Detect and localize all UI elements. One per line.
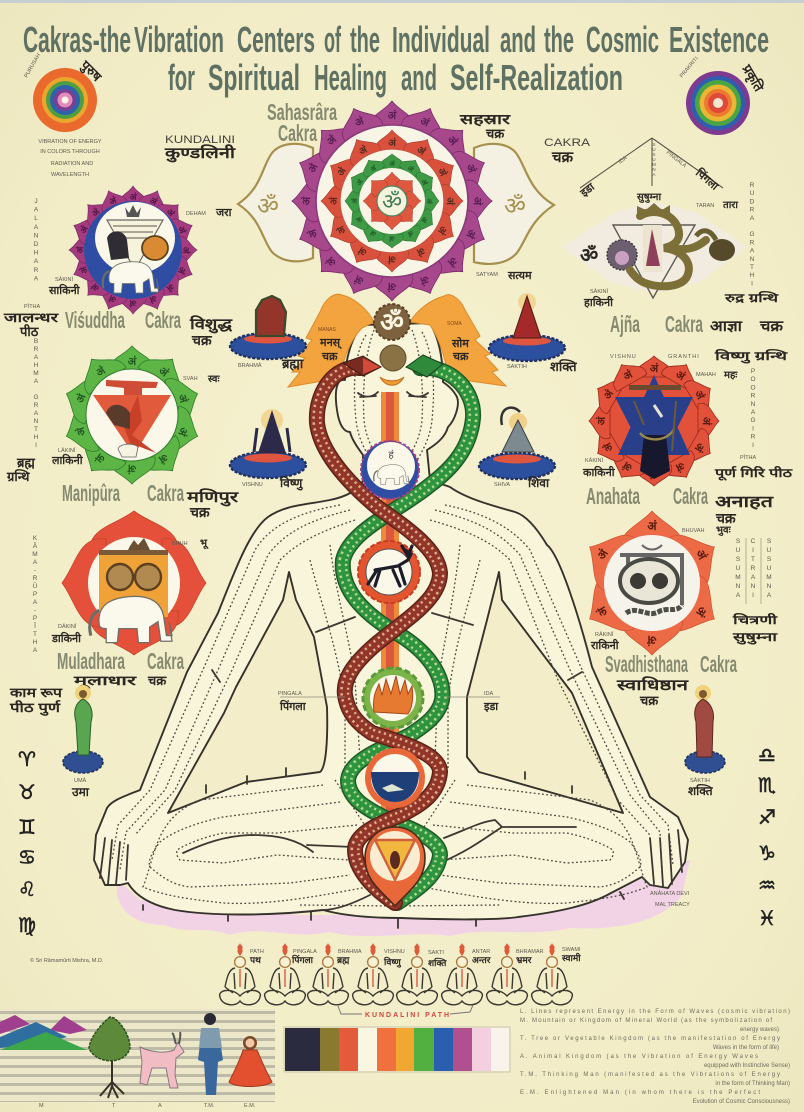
- title: Individual: [392, 19, 490, 60]
- legend text: in the form of Thinking Man): [715, 1081, 790, 1087]
- sahasrara side lobes: [238, 144, 554, 264]
- colour spectrum bars: [284, 1027, 510, 1072]
- svadhisthana labels: चक्र: [639, 693, 659, 708]
- title: Self-Realization: [450, 57, 623, 98]
- jalandhara pitha label: जालन्धर: [3, 310, 59, 325]
- panel letters: M: [39, 1103, 44, 1109]
- right wing: [410, 295, 506, 386]
- purusah colour circle: पुरुष: [76, 57, 105, 85]
- small figure labels: BRAHMA: [338, 949, 362, 955]
- pink aura beneath figure: [117, 768, 690, 936]
- wings and om medallion: ॐ: [380, 307, 404, 337]
- left wing: [288, 294, 374, 387]
- spine: [381, 392, 399, 862]
- sahasrara small labels: जरा: [215, 207, 233, 219]
- goat: [140, 1032, 184, 1088]
- visuddha heading: चक्र: [191, 332, 213, 348]
- left arm gap: [168, 572, 327, 813]
- centre om: ॐ: [382, 189, 402, 214]
- creases: [143, 613, 624, 928]
- eight small figures: [220, 943, 572, 1005]
- kundalini label: KUNDALINI: [165, 134, 235, 146]
- sahasrara label: Sahasrâra: [267, 99, 337, 125]
- ajna labels: [583, 182, 780, 309]
- panel letters: [39, 1103, 256, 1109]
- sahasrara side lobes: ॐ: [257, 193, 279, 220]
- vishnu granthi label: पूर्ण गिरि पीठ: [714, 466, 793, 481]
- sahasrara label: Cakra: [278, 120, 317, 146]
- kama rupa pitha labels: काम रूप: [9, 685, 63, 700]
- manipura heading: [62, 480, 239, 520]
- small figure labels: पथ: [249, 955, 262, 965]
- susumna nadi labels: SUSUMNA: [734, 538, 742, 601]
- muladhara cakra: [62, 511, 206, 655]
- pingala ida labels: [278, 691, 500, 713]
- wings and om medallion: मनस्: [319, 337, 342, 350]
- vishnu deity: VISHNU: [242, 482, 263, 488]
- small figure labels: विष्णु: [383, 956, 402, 968]
- ajna triangle lines: तारा: [722, 200, 738, 211]
- nadi dotted lines: [112, 330, 673, 906]
- ajna triangle lines: पिंगला: [692, 165, 723, 193]
- vibration caption: RADIATION AND: [51, 161, 93, 167]
- sahasrara label: चक्र: [485, 126, 505, 141]
- muladhara heading: Muladhara: [57, 648, 125, 674]
- kama rupa pitha labels: [9, 535, 209, 716]
- shakti deity: SAKTIH: [507, 364, 527, 370]
- legend text: [520, 1009, 790, 1105]
- muladhara heading: चक्र: [147, 673, 167, 688]
- kama rupa pitha labels: KÂMA-RÛPA-PÎTHA: [32, 535, 38, 655]
- shiva deity: [479, 408, 555, 490]
- ajna heading: Cakra: [665, 311, 703, 337]
- small figure labels: SAKTI: [428, 950, 444, 956]
- vishnu deity: [230, 409, 306, 491]
- zodiac signs right: ♏︎: [758, 775, 776, 797]
- susumna nadi labels: चित्रणी: [731, 613, 778, 627]
- small figure labels: शक्ति: [428, 957, 447, 968]
- serpent heads and third eye: [343, 345, 443, 385]
- seated figure: [94, 323, 688, 928]
- wings and om medallion: चक्र: [452, 351, 469, 363]
- small figure labels: BHRAMAR: [516, 949, 544, 955]
- red petal ring: [321, 130, 463, 272]
- kama rupa pitha labels: पीठ पुर्ण: [9, 700, 61, 716]
- ajna heading: Ajña: [610, 311, 640, 337]
- brahma granthi hindi: [6, 455, 35, 484]
- anahata heading: KÂKINÎ: [585, 457, 604, 464]
- artist credit: [650, 890, 690, 908]
- legend text: Waves in the form of life): [713, 1045, 779, 1051]
- red serpent: [317, 368, 440, 903]
- pingala ida labels: PINGALA: [278, 691, 302, 697]
- kama rupa pitha labels: भू: [200, 538, 209, 550]
- kundalini label: कुण्डलिनी: [164, 144, 236, 163]
- shakini figure right: शक्ति: [688, 784, 714, 798]
- artist credit: MAL TREACY: [655, 902, 690, 908]
- uma figure: [63, 685, 103, 799]
- sakini label: SÂKINÎ: [55, 276, 74, 283]
- title: the: [544, 19, 574, 60]
- ajna triangle lines: SUSUMNA: [651, 142, 656, 177]
- shakti deity: [489, 293, 577, 374]
- vishnu granthi label: महः: [723, 370, 738, 381]
- manipura heading: Cakra: [147, 480, 184, 506]
- muladhara heading: मूलाधार: [72, 673, 137, 689]
- wings and om medallion: [288, 294, 506, 387]
- vishnu granthi label: VISHNU: [610, 354, 637, 360]
- sakini label: साकिनी: [48, 283, 81, 297]
- anahata heading: [582, 457, 774, 526]
- title: Vibration: [134, 19, 224, 60]
- fingers: [100, 830, 682, 886]
- lakini label: SVAH: [183, 376, 198, 382]
- anahata cakra: [589, 356, 719, 486]
- sahasrara label: [267, 99, 512, 146]
- wings and om medallion: चक्र: [321, 351, 338, 363]
- pingala ida labels: IDA: [484, 691, 494, 697]
- anahata heading: काकिनी: [582, 465, 616, 479]
- visuddha heading: विशुद्ध: [189, 315, 233, 334]
- panel letters: E.M.: [244, 1103, 256, 1109]
- zodiac signs left: ♋︎: [18, 847, 36, 869]
- brahma deity: ब्रह्मा: [281, 356, 304, 371]
- vibration caption: VIBRATION OF ENERGY: [38, 139, 102, 145]
- visuddha heading: Viśuddha: [65, 307, 125, 333]
- kama rupa pitha labels: BHUH: [172, 541, 188, 547]
- svadhisthana cakra: [574, 511, 730, 655]
- title: and: [401, 57, 437, 98]
- orange figure: [142, 236, 168, 260]
- shiva deity: SHIVA: [494, 482, 510, 488]
- eyes: [358, 392, 428, 397]
- susumna nadi labels: CITRANI: [750, 538, 756, 601]
- zodiac signs right: ♓︎: [758, 908, 776, 930]
- svadhisthana labels: [590, 525, 737, 708]
- small figure labels: PINGALA: [293, 949, 317, 955]
- manipura cakra: [59, 346, 205, 484]
- shiva figure: [107, 231, 129, 260]
- anahata heading: चक्र: [715, 510, 737, 526]
- ajna labels: SÂKINÎ: [590, 288, 609, 295]
- title: [23, 19, 769, 98]
- jalandhara pitha label: पीठ: [19, 324, 40, 339]
- zodiac signs left: ♉︎: [18, 782, 36, 804]
- ajna triangle lines: इडा: [578, 180, 598, 200]
- copyright: © Sri Râmamûrti Mishra, M.D.: [30, 957, 104, 964]
- outer magenta petals: [292, 101, 492, 301]
- legend text: energy waves): [740, 1027, 779, 1033]
- visuddha cakra: [69, 186, 197, 314]
- muladhara heading: [57, 648, 184, 689]
- shakini figure right: SÂKTIH: [690, 777, 710, 784]
- standing man: [198, 1013, 223, 1095]
- anahata heading: Anahata: [586, 483, 640, 509]
- cakra label: चक्र: [551, 149, 575, 166]
- uma figure: उमा: [71, 785, 90, 799]
- ajna heading: [610, 311, 785, 337]
- title: Healing: [314, 57, 387, 98]
- anahata heading: अनाहत: [715, 494, 774, 511]
- prakriti colour circle: प्रकृति: [738, 61, 767, 95]
- svadhisthana labels: भुवः: [716, 525, 732, 536]
- inner red petals: [363, 172, 421, 230]
- wings and om medallion: SOMA: [447, 321, 462, 327]
- pingala ida labels: इडा: [483, 701, 499, 713]
- susumna nadi labels: [731, 538, 778, 645]
- kundalini path: [338, 1005, 473, 1019]
- kundalini path: KUNDALINI PATH: [365, 1012, 449, 1019]
- zodiac signs left: ♌︎: [18, 879, 36, 901]
- legend text: L. Lines represent Energy in the Form of Waves (cosmic vibration): [520, 1009, 790, 1015]
- uma figure: UMÂ: [74, 777, 87, 784]
- svadhisthana labels: स्वाधिष्ठान: [616, 676, 689, 694]
- solar plexus cakra: [363, 668, 423, 728]
- zodiac signs left: ♍︎: [18, 915, 36, 937]
- enlightened man: [229, 1036, 272, 1086]
- jalandhara vertical label: JALANDHARA: [32, 198, 40, 284]
- visuddha heading: Cakra: [145, 307, 181, 333]
- green petal ring: [345, 154, 439, 248]
- ajna triangle lines: PINGALA: [665, 150, 688, 169]
- zodiac signs right: [758, 745, 776, 930]
- sahasrara small labels: [186, 207, 532, 282]
- shakini figure right: [685, 685, 725, 798]
- panel letters: T: [112, 1103, 116, 1109]
- brahma granthi hindi: ग्रन्थि: [6, 469, 30, 484]
- zodiac signs right: ♑︎: [758, 843, 776, 865]
- legend text: A. Animal Kingdom (as the Vibration of Energy Waves: [520, 1054, 758, 1060]
- vishnu granthi label: MAHAH: [696, 372, 716, 378]
- lakini label: स्वः: [207, 374, 220, 385]
- legend text: T. Tree or Vegetable Kingdom (as the manifestation of Energy: [520, 1036, 780, 1042]
- small figure labels: ANTAR: [472, 949, 490, 955]
- prakriti colour circle: [679, 56, 767, 135]
- sahasrara cakra lotus: [292, 101, 492, 301]
- legend text: equipped with Instinctive Sense): [704, 1063, 790, 1069]
- vishnu granthi label: PÎTHA: [740, 454, 757, 461]
- sakini label: [48, 276, 81, 297]
- shiva deity: शिवा: [527, 476, 550, 490]
- vibration caption: [38, 139, 102, 178]
- small figure labels: पिंगला: [291, 954, 314, 965]
- red triangle: [93, 395, 171, 455]
- zodiac signs right: ♒︎: [758, 875, 776, 897]
- shakti deity: शक्ति: [550, 359, 577, 374]
- ajna cakra: ॐ: [580, 244, 598, 267]
- ajna cakra: [562, 202, 747, 298]
- ajna triangle lines: TARAN: [696, 203, 714, 209]
- ajna heading: आज्ञा: [710, 318, 743, 335]
- small figure labels: अन्तर: [472, 955, 491, 965]
- svadhisthana labels: राकिनी: [590, 638, 620, 652]
- manas labels: MANAS: [318, 327, 336, 333]
- ajna labels: RUDRA GRANTHI: [748, 182, 756, 289]
- title: Cosmic: [586, 19, 659, 60]
- sahasrara side lobes: ॐ: [504, 193, 526, 220]
- lakini label: लाकिनी: [51, 453, 84, 467]
- susumna nadi labels: सुषुम्ना: [731, 630, 778, 645]
- vishnu granthi label: विष्णु ग्रन्थि: [713, 349, 789, 364]
- panel letters: T.M.: [204, 1103, 215, 1109]
- muladhara heading: Cakra: [147, 648, 184, 674]
- root cakra: [365, 827, 425, 906]
- ajna heading: चक्र: [759, 318, 785, 335]
- vibration caption: WAVELENGTH: [51, 172, 89, 178]
- tree: [89, 1017, 130, 1098]
- right arm gap: [467, 572, 623, 813]
- throat cakra: [361, 441, 419, 499]
- legend text: M. Mountain or Kingdom of Mineral World (as the symbolization of: [520, 1018, 772, 1024]
- mountains: [0, 1015, 87, 1050]
- cakra label: [544, 137, 591, 166]
- pingala ida labels: पिंगला: [279, 699, 307, 713]
- title: Centers: [237, 19, 315, 60]
- sahasrara small labels: सत्यम: [507, 270, 532, 282]
- water letter drawing: [620, 555, 682, 605]
- legend text: Evolution of Cosmic Consciousness): [693, 1099, 790, 1105]
- wings and om medallion: सोम: [451, 336, 469, 350]
- water cakra: [365, 748, 425, 808]
- svadhisthana labels: Svadhisthana: [605, 651, 688, 677]
- small figure labels: PATH: [250, 949, 264, 955]
- small figure labels: VISHNU: [384, 949, 405, 955]
- small figure labels: [249, 947, 581, 968]
- lakini label: LÂKINÎ: [58, 447, 76, 454]
- ajna labels: रुद्र ग्रन्थि: [724, 291, 780, 305]
- anahata heading: Cakra: [673, 483, 708, 509]
- small figure labels: भ्रमर: [516, 955, 532, 965]
- brahma granthi hindi: ब्रह्म: [16, 455, 35, 470]
- sahasrara small labels: DEHAM: [186, 211, 206, 217]
- svadhisthana labels: RÂKINÎ: [595, 631, 614, 638]
- title: Cakras-the: [23, 19, 131, 60]
- purusah colour circle: [24, 53, 105, 132]
- small figure labels: ब्रह्म: [336, 955, 350, 965]
- manipura heading: मणिपुर: [186, 488, 239, 507]
- title: for: [168, 57, 195, 98]
- brahma deity: [230, 296, 306, 371]
- sahasrara label: सहस्रार: [459, 111, 512, 127]
- manipura heading: Manipûra: [62, 480, 120, 506]
- zodiac signs left: ♈︎: [18, 749, 36, 771]
- vishnu deity: विष्णु: [279, 476, 304, 491]
- lakini label: [51, 374, 220, 467]
- white elephant: [103, 262, 158, 293]
- ajna triangle lines: सुषुम्ना: [636, 192, 661, 203]
- zodiac signs left: ♊︎: [18, 817, 36, 839]
- kama rupa pitha labels: DÂKINÎ: [58, 623, 77, 630]
- black deer: [368, 546, 412, 586]
- om medallion: [374, 304, 410, 340]
- panel letters: A: [158, 1103, 162, 1109]
- legend text: E.M. Enlightened Man (in whom there is the Perfect: [520, 1090, 760, 1096]
- title: Spiritual: [208, 57, 300, 98]
- ajna triangle lines: [578, 138, 738, 211]
- gold om: [630, 212, 706, 286]
- evolution panel: [0, 1009, 275, 1109]
- ajna triangle lines: IDA: [618, 155, 629, 166]
- sahasrara small labels: SATYAM: [476, 272, 498, 278]
- small figure labels: SWAMI: [562, 947, 581, 953]
- kundalini label: [164, 134, 236, 163]
- kama rupa pitha labels: डाकिनी: [51, 631, 82, 645]
- vibration caption: IN COLORS THROUGH: [40, 149, 100, 155]
- svadhisthana labels: Cakra: [700, 651, 737, 677]
- vishnu granthi label: [610, 349, 793, 481]
- brahma deity: BRAHMÂ: [238, 362, 262, 369]
- legend text: T.M. Thinking Man (manifested as the Vibrations of Energy: [520, 1072, 780, 1078]
- blue star: [615, 375, 693, 473]
- body silhouette: [94, 323, 688, 919]
- zodiac signs right: ♐︎: [758, 807, 776, 829]
- prakriti colour circle: PRAKRITI: [679, 56, 700, 79]
- purusah colour circle: PURUSAH: [24, 53, 42, 79]
- ajna labels: हाकिनी: [583, 295, 614, 309]
- flames: [373, 676, 413, 714]
- vishnu granthi label: GRANTHI: [668, 354, 700, 360]
- svadhisthana labels: BHUVAH: [682, 528, 705, 534]
- title: the: [350, 19, 380, 60]
- artist credit: ANÂHATA DEVI: [650, 890, 690, 897]
- cakra label: CAKRA: [544, 137, 591, 149]
- visuddha heading: [65, 307, 233, 348]
- green serpent: [343, 368, 473, 903]
- vishnu granthi label: POORNAGIRI: [750, 368, 756, 450]
- brahma granthi vertical label: BRAHMA GRANTHI: [32, 338, 40, 450]
- title: of: [324, 19, 342, 60]
- jalandhara pitha label: [3, 303, 59, 339]
- throat cakra: हं: [388, 449, 394, 461]
- manipura heading: चक्र: [189, 504, 211, 520]
- small figure labels: स्वामी: [561, 952, 581, 963]
- zodiac signs left: [18, 749, 36, 937]
- title: and: [500, 19, 536, 60]
- susumna nadi labels: SUSUMNA: [766, 538, 772, 601]
- jalandhara pitha label: PÎTHA: [24, 303, 41, 310]
- heart cakra: [358, 541, 420, 603]
- zodiac signs right: ♎︎: [758, 745, 776, 767]
